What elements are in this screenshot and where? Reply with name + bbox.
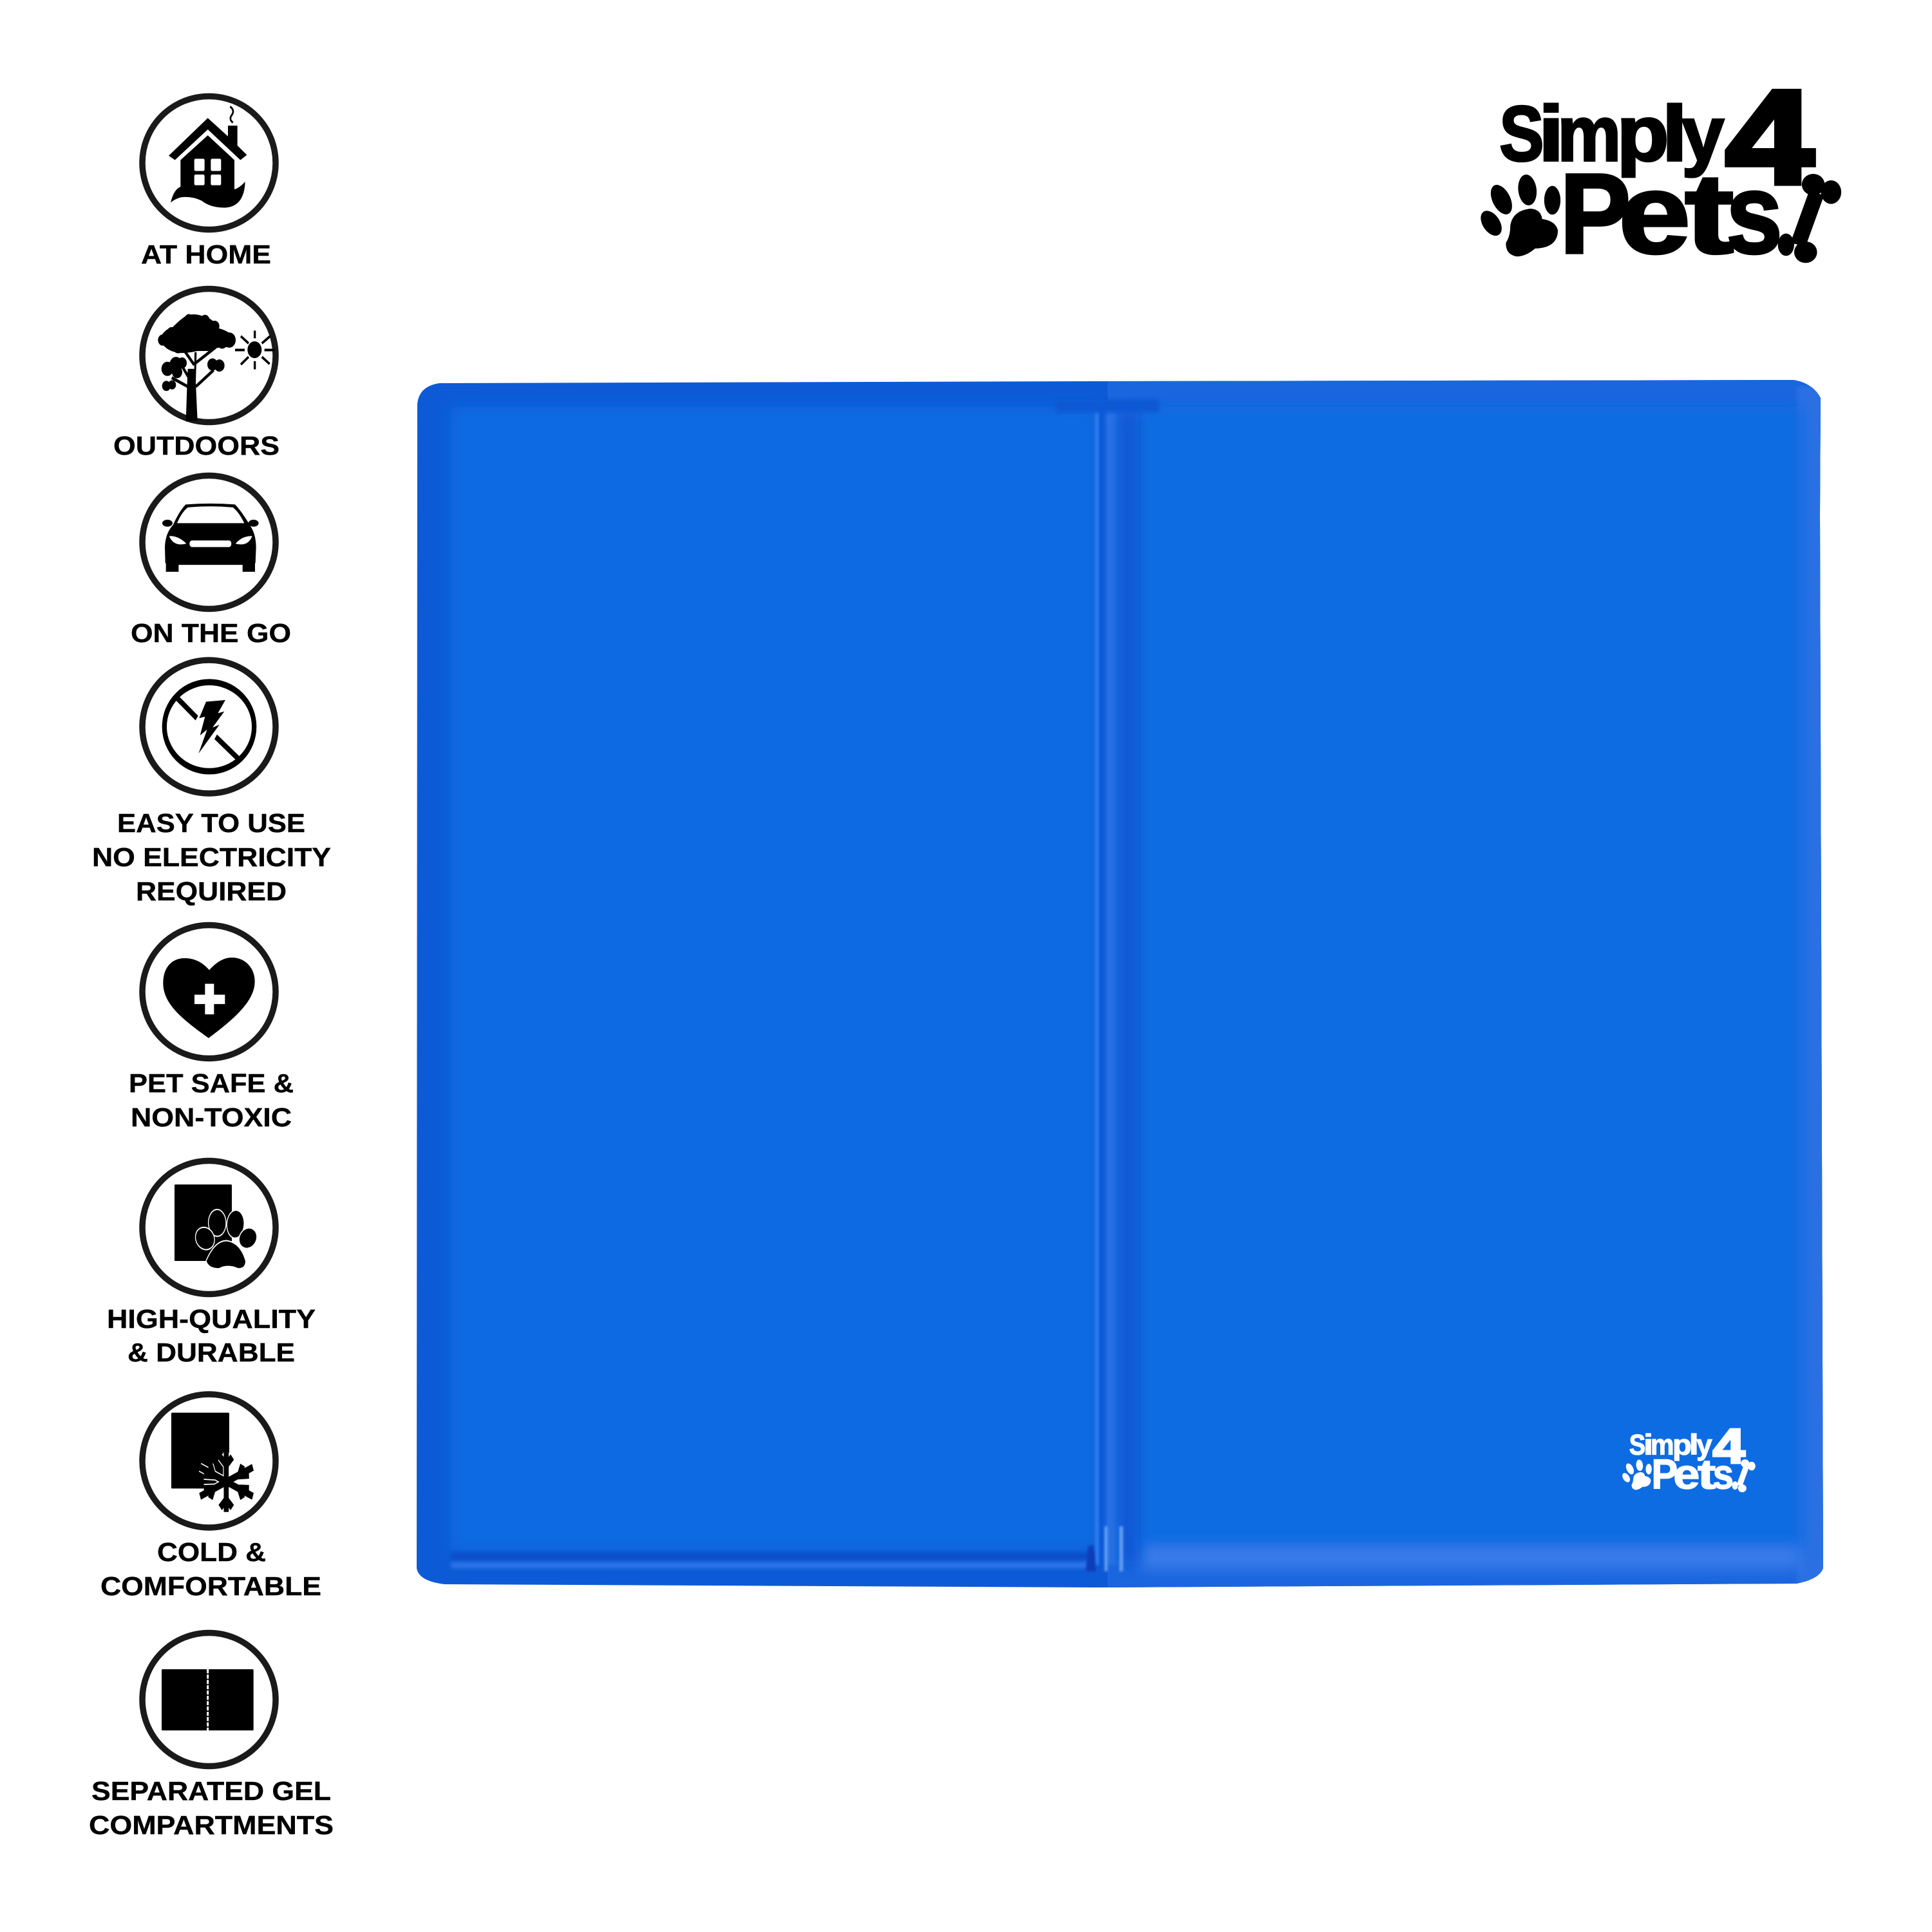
feature: cold and comfortable [100,1394,321,1601]
label: cold and comfortable: COMFORTABLE [100,1571,321,1601]
icon: bone [1778,174,1841,263]
logo: Simply4Pets black: l [1662,90,1687,178]
logo: Simply4Pets white on mat: m [1651,1428,1674,1461]
icon: white bone [1732,1459,1756,1492]
logo: Simply4Pets black: P [1560,151,1631,278]
label: at home: AT HOME [141,240,271,269]
logo: Simply4Pets white on mat: p [1672,1428,1692,1461]
feature: at home [141,97,276,269]
feature: pet safe and non-toxic [129,925,294,1132]
logo: Simply4Pets white on mat [1621,1418,1756,1498]
product: blue gel cooling mat [412,374,1829,1591]
label: high-quality and durable [107,1304,316,1367]
feature: separated gel compartments [89,1633,334,1840]
logo: Simply4Pets black: S [1499,90,1544,178]
label: pet safe and non-toxic [129,1068,294,1132]
icon: mat with snowflake [171,1413,253,1512]
logo: Simply4Pets black: t [1685,151,1734,278]
icon: paw print [1477,174,1560,256]
logo: Simply4Pets black: y [1681,90,1724,178]
logo: Simply4Pets black: p [1616,90,1669,178]
logo: Simply4Pets black: s [1726,151,1783,278]
label: easy to use no electricity required: NO ELECTRICITY [92,842,331,872]
icon: no electricity bolt [164,682,254,772]
icon: mat with paw [175,1184,258,1269]
label: high-quality and durable: HIGH-QUALITY [107,1304,316,1334]
feature: outdoors [113,289,279,460]
label: separated gel compartments [89,1776,334,1840]
icon: white paw print [1621,1459,1652,1490]
logo: Simply4Pets white on mat: t [1698,1451,1716,1498]
logo: Simply4Pets black: m [1557,90,1621,178]
logo: Simply4Pets black: e [1618,151,1690,278]
label: separated gel compartments: SEPARATED GEL [91,1776,331,1806]
logo: Simply4Pets white on mat: 4 [1713,1418,1745,1473]
label: on the go: ON THE GO [131,618,291,648]
label: cold and comfortable [100,1537,321,1601]
label: separated gel compartments: COMPARTMENTS [89,1810,334,1840]
logo: Simply4Pets black [1477,63,1841,278]
feature: high-quality and durable [107,1160,316,1367]
label: pet safe and non-toxic: NON-TOXIC [131,1103,292,1132]
logo: Simply4Pets white on mat: i [1643,1428,1653,1461]
icon: two compartments [162,1669,254,1730]
icon: car [162,504,259,572]
icon: heart with cross [163,958,255,1038]
feature: easy to use, no electricity required [92,660,331,906]
logo: Simply4Pets black: 4 [1726,63,1814,212]
label: outdoors: OUTDOORS [113,431,279,460]
logo: Simply4Pets white on mat: y [1696,1428,1712,1461]
label: easy to use no electricity required: EASY TO USE [117,808,305,838]
label: high-quality and durable: & DURABLE [128,1338,295,1367]
icon: tree and sun [158,314,275,422]
logo: Simply4Pets white on mat: e [1673,1451,1700,1498]
logo: Simply4Pets black: i [1539,90,1564,178]
label: easy to use no electricity required: REQUIRED [136,876,287,906]
label: pet safe and non-toxic: PET SAFE & [129,1068,294,1098]
label: cold and comfortable: COLD & [157,1537,266,1567]
logo: Simply4Pets white on mat: l [1689,1428,1699,1461]
logo: Simply4Pets white on mat: P [1651,1451,1678,1498]
logo: Simply4Pets white on mat: s [1713,1451,1734,1498]
label: easy to use no electricity required [92,808,331,906]
logo: Simply4Pets white on mat: S [1629,1428,1645,1461]
feature: on the go [131,475,291,648]
icon: house [169,106,247,207]
